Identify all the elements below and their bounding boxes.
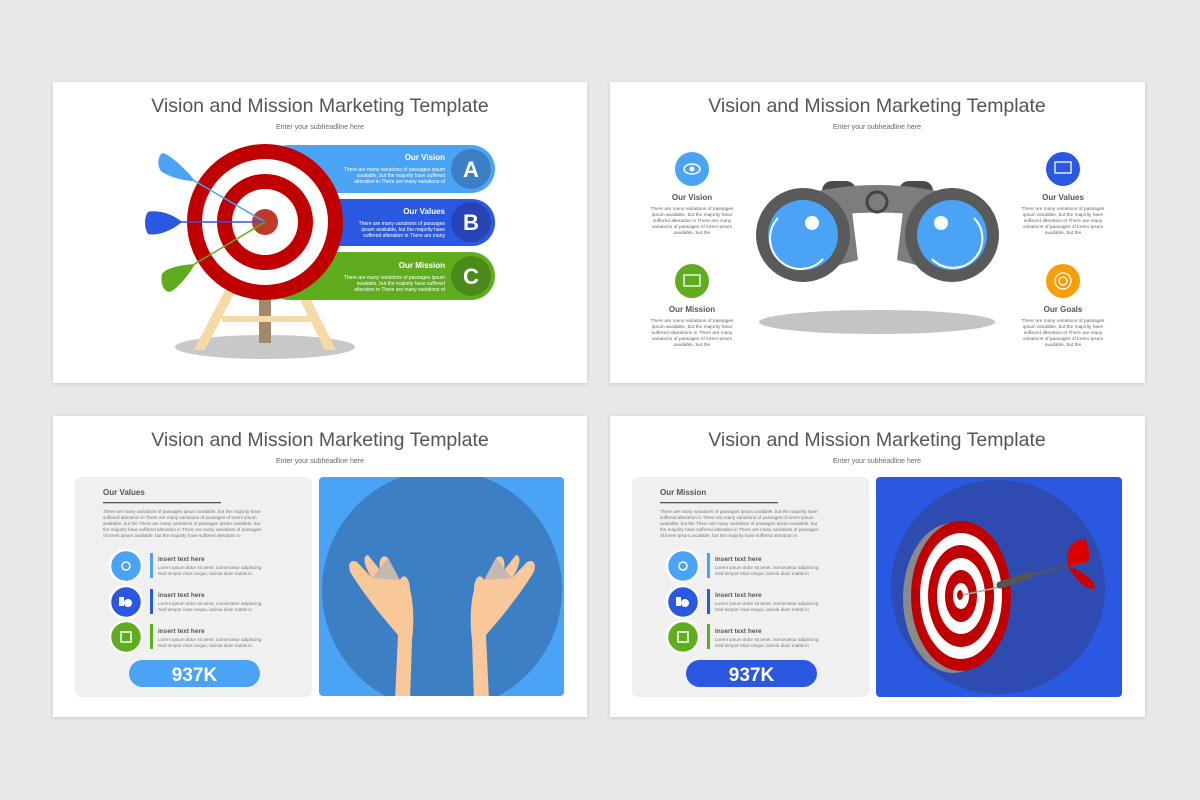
item: Our Goals: ipsum available, but the majority have: [1023, 324, 1103, 330]
title: Vision and Mission Marketing Template: [708, 429, 1046, 451]
item: Our Vision: ipsum available, but the majority have: [652, 212, 732, 218]
bar: Our Vision: There are many variations of passages ipsum: [344, 167, 445, 173]
bar: Our Vision: Our Vision: [405, 153, 445, 162]
item: Our Goals: [1022, 264, 1105, 348]
bar: Our Mission: alteration in There are many variations of: [354, 287, 446, 293]
left panel: the majority have suffered alteration in There are many variations of passages: [103, 527, 262, 532]
left panel: Our Values: [103, 488, 145, 497]
item: Our Values: available, but the: [1045, 230, 1081, 236]
item: Our Values: ipsum available, but the majority have: [1023, 212, 1103, 218]
left panel: [632, 477, 869, 697]
left panel: Lorem ipsum dolor sit amet, consectetur adipiscing: [715, 637, 819, 642]
item: Our Mission: ipsum available, but the majority have: [652, 324, 732, 330]
bar: Our Mission: There are many variations of passages ipsum: [344, 275, 445, 281]
item: Our Values: variations of passages of lorem ipsum: [1023, 224, 1103, 230]
bar: Our Mission: available, but the majority have suffered: [357, 281, 445, 287]
left panel: available, but the There are many variations of passages ipsum available, but: [103, 521, 261, 526]
bar: Our Mission: [265, 252, 495, 300]
item: Our Goals: suffered alteration in There are many: [1024, 330, 1103, 336]
left panel: suffered alteration in There are many variations of passages of lorem ipsum: [103, 515, 257, 520]
left panel: Sed tempor risus neque, lacinia diam mattis in: [158, 571, 252, 576]
left panel: Lorem ipsum dolor sit amet, consectetur adipiscing: [715, 565, 819, 570]
left panel: the majority have suffered alteration in There are many variations of passages: [660, 527, 819, 532]
bar: Our Values: There are many variations of passages: [359, 221, 445, 227]
item: Our Mission: There are many variations of passages: [651, 318, 734, 324]
item: Our Vision: variations of passages of lorem ipsum: [652, 224, 732, 230]
item: Our Mission: suffered alterations in There are many: [652, 330, 733, 336]
left panel: insert text here: [715, 628, 762, 635]
item: Our Goals: variations of passages of lorem ipsum: [1023, 336, 1103, 342]
item: Our Goals: Our Goals: [1044, 305, 1083, 314]
bar: Our Vision: alteration in There are many variations of: [354, 179, 446, 185]
left panel: 937K: [729, 665, 774, 686]
bar: Our Mission: Our Mission: [399, 261, 445, 270]
item: Our Mission: Our Mission: [669, 305, 715, 314]
shadow ellipse: [759, 310, 995, 334]
left panel: 937K: [172, 665, 217, 686]
left panel: Lorem ipsum dolor sit amet, consectetur adipiscing: [158, 637, 262, 642]
left panel: of lorem ipsum available, but the majority have suffered alteration in: [660, 533, 798, 538]
left panel: Sed tempor risus neque, lacinia diam mattis in: [715, 643, 809, 648]
left panel: suffered alteration in There are many variations of passages of lorem ipsum: [660, 515, 814, 520]
left panel: [75, 477, 312, 697]
left panel: Sed tempor risus neque, lacinia diam mattis in: [715, 607, 809, 612]
slide 4: our mission with dartboard: [610, 416, 1145, 717]
item: Our Values: There are many variations of passages: [1022, 206, 1105, 212]
slide 2: binoculars: [610, 82, 1145, 383]
title: Vision and Mission Marketing Template: [151, 429, 489, 451]
easel: [194, 290, 336, 350]
bar: Our Vision: available, but the majority have suffered: [357, 173, 445, 179]
item: Our Mission: available, but the: [674, 342, 710, 348]
subtitle: Enter your subheadline here: [276, 124, 364, 131]
slide 3: our values with hands: [53, 416, 587, 717]
bar: Our Vision: A: [463, 157, 479, 182]
subtitle: Enter your subheadline here: [833, 458, 921, 465]
item: Our Values: suffered alteration in There are many: [1024, 218, 1103, 224]
item: Our Vision: suffered alteration in There are many: [653, 218, 732, 224]
title: Vision and Mission Marketing Template: [151, 95, 489, 117]
item: Our Values: Our Values: [1042, 193, 1084, 202]
slide 1: target with vision, values, mission bars: [53, 82, 587, 383]
left panel: Lorem ipsum dolor sit amet, consectetur adipiscing: [715, 601, 819, 606]
item: Our Goals: There are many variations of passages: [1022, 318, 1105, 324]
left panel: insert text here: [158, 628, 205, 635]
darts: [145, 153, 265, 292]
right panel: hands: [319, 470, 564, 710]
item: Our Vision: [651, 152, 734, 236]
bar: Our Values: B: [463, 210, 479, 235]
left panel: insert text here: [158, 592, 205, 599]
target: [187, 144, 343, 300]
bar: Our Values: [265, 199, 495, 246]
right panel: dartboard: [876, 477, 1122, 697]
left panel: of lorem ipsum available, but the majority have suffered alteration in: [103, 533, 241, 538]
bar: Our Mission: C: [463, 264, 479, 289]
bar: Our Vision: [265, 145, 495, 193]
title: Vision and Mission Marketing Template: [708, 95, 1046, 117]
item: Our Mission: variations of passages of lorem ipsum: [652, 336, 732, 342]
left panel: available, but the There are many variations of passages ipsum available, but: [660, 521, 818, 526]
left panel: insert text here: [158, 556, 205, 563]
item: Our Vision: Our Vision: [672, 193, 712, 202]
shadow ellipse: [175, 335, 355, 359]
left panel: Sed tempor risus neque, lacinia diam mattis in: [158, 643, 252, 648]
left panel: Sed tempor risus neque, lacinia diam mattis in: [158, 607, 252, 612]
item: Our Vision: available, but the: [674, 230, 710, 236]
item: Our Goals: available, but the: [1045, 342, 1081, 348]
left panel: There are many variations of passages ipsum available, but the majority have: [103, 509, 261, 514]
left panel: Our Mission: [660, 488, 706, 497]
left panel: There are many variations of passages ipsum available, but the majority have: [660, 509, 818, 514]
left panel: Lorem ipsum dolor sit amet, consectetur adipiscing: [158, 601, 262, 606]
left panel: insert text here: [715, 556, 762, 563]
item: Our Values: [1022, 152, 1105, 236]
bar: Our Values: Our Values: [403, 207, 446, 216]
binoculars: [756, 181, 999, 282]
subtitle: Enter your subheadline here: [833, 124, 921, 131]
item: Our Vision: There are many variations of passages: [651, 206, 734, 212]
left panel: Lorem ipsum dolor sit amet, consectetur adipiscing: [158, 565, 262, 570]
subtitle: Enter your subheadline here: [276, 458, 364, 465]
left panel: Sed tempor risus neque, lacinia diam mattis in: [715, 571, 809, 576]
bar: Our Values: ipsum available, but the majority have: [361, 227, 445, 233]
left panel: insert text here: [715, 592, 762, 599]
bar: Our Values: suffered alteration in There are many: [363, 233, 445, 239]
item: Our Mission: [651, 264, 734, 348]
